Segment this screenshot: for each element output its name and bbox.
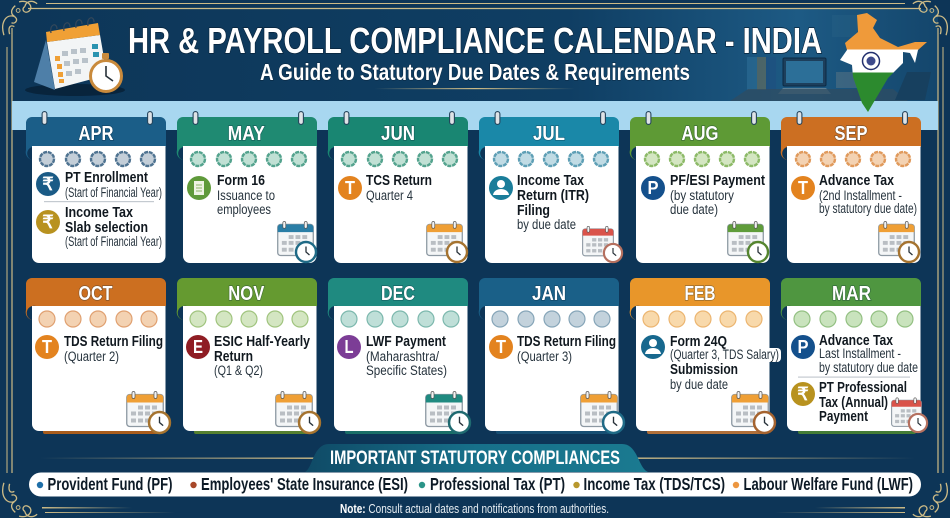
card: JUL: by due date	[517, 217, 576, 232]
card: MAR	[781, 278, 927, 434]
card: JUN: Quarter 4	[366, 188, 413, 203]
legend item: provident fund: Provident Fund (PF)	[48, 474, 172, 494]
legend item: employees state insurance: Employees' State Insurance (ESI)	[201, 474, 408, 494]
card: NOV: NOV	[228, 283, 265, 305]
card: APR	[26, 112, 166, 263]
card: JAN	[479, 278, 624, 434]
card: AUG: (by statutory	[670, 188, 734, 203]
card: NOV: Return	[214, 348, 253, 365]
card: MAY: MAY	[228, 123, 265, 145]
card: DEC: LWF Payment	[366, 333, 446, 350]
card: FEB: FEB	[684, 283, 716, 305]
card: SEP: Advance Tax	[819, 172, 895, 189]
card: DEC: (Maharashtra/	[366, 349, 439, 364]
card: FEB	[630, 278, 781, 434]
card: JAN: (Quarter 3)	[517, 349, 572, 364]
legend pill	[29, 472, 921, 496]
card: SEP: (2nd Installment -	[819, 188, 902, 203]
footnote: Note: Consult actual dates and notifications from authorities.	[340, 502, 609, 516]
card: MAY: Issuance to	[217, 188, 275, 203]
card: SEP	[781, 112, 921, 263]
card: MAR: P	[798, 337, 808, 357]
card: APR: Income Tax	[65, 204, 134, 221]
card: SEP: T	[798, 178, 808, 198]
card: AUG: due date)	[670, 202, 718, 217]
card: JAN: TDS Return Filing	[517, 333, 616, 350]
card: FEB: by due date	[670, 377, 728, 392]
card: FEB: Form 24Q	[670, 333, 727, 350]
icon: desk calendar and stopwatch	[25, 18, 125, 96]
card: NOV	[177, 278, 320, 434]
card: APR: PT Enrollment	[65, 169, 148, 186]
card: MAR: ₹	[797, 384, 809, 404]
card: DEC: DEC	[381, 283, 415, 305]
card: DEC: L	[344, 337, 354, 357]
subtitle: A Guide to Statutory Due Dates & Requirements	[260, 59, 690, 85]
card: JUN: JUN	[381, 123, 415, 145]
card: NOV: E	[193, 337, 203, 357]
card: JUL: Income Tax	[517, 172, 585, 189]
card: MAR: MAR	[832, 283, 871, 305]
card: JUL	[479, 112, 622, 263]
card: OCT: OCT	[78, 283, 112, 305]
card: JUL: Return (ITR)	[517, 187, 589, 204]
card: MAR: Advance Tax	[819, 332, 894, 349]
card: JAN: T	[496, 337, 506, 357]
card: FEB: Submission	[670, 361, 738, 378]
card: MAR: Payment	[819, 408, 868, 425]
card: JUN	[328, 112, 468, 263]
card: JUL: JUL	[533, 123, 565, 145]
light blue band	[12, 101, 938, 130]
card: DEC: Specific States)	[366, 363, 447, 378]
card: AUG	[630, 112, 770, 263]
card: JAN: JAN	[532, 283, 566, 305]
card: AUG: PF/ESI Payment	[670, 172, 765, 189]
legend item: income tax: Income Tax (TDS/TCS)	[584, 474, 725, 494]
card: APR: APR	[78, 123, 114, 145]
card: APR: ₹	[42, 174, 54, 194]
icon: India map in flag colours	[840, 13, 927, 112]
card: JUN: T	[345, 178, 355, 198]
card: MAY: Form 16	[217, 172, 265, 189]
card: OCT	[26, 278, 170, 434]
card: NOV: (Q1 & Q2)	[214, 363, 263, 378]
card: MAR: PT Professional	[819, 379, 907, 396]
card: MAY	[177, 112, 317, 263]
card: MAY: employees	[217, 202, 271, 217]
card: APR: ₹	[42, 212, 54, 232]
card: MAR: Last Installment -	[819, 346, 901, 361]
subtitle underline	[375, 88, 575, 89]
card: APR: (Start of Financial Year)	[65, 234, 162, 249]
card: JUN: TCS Return	[366, 172, 432, 189]
card: APR: (Start of Financial Year)	[65, 185, 162, 200]
legend heading banner: IMPORTANT STATUTORY COMPLIANCES	[330, 447, 620, 469]
card: SEP: SEP	[834, 123, 868, 145]
legend item: professional tax: Professional Tax (PT)	[430, 474, 565, 494]
card: FEB: (Quarter 3, TDS Salary)	[670, 347, 779, 362]
header background with desk scene	[12, 9, 938, 101]
card: AUG: P	[648, 178, 658, 198]
card: MAR: by statutory due date	[819, 360, 918, 375]
card: APR: Slab selection	[65, 219, 148, 236]
card: SEP: by statutory due date)	[819, 201, 917, 216]
legend heading banner	[40, 444, 915, 472]
card: MAR: Tax (Annual)	[819, 394, 888, 411]
card: OCT: T	[42, 337, 52, 357]
card: JUL: Filing	[517, 202, 550, 219]
card: NOV: ESIC Half-Yearly	[214, 333, 311, 350]
card: DEC	[328, 278, 470, 434]
card: AUG: AUG	[682, 123, 718, 145]
card: OCT: (Quarter 2)	[64, 349, 119, 364]
card: OCT: TDS Return Filing	[64, 333, 163, 350]
